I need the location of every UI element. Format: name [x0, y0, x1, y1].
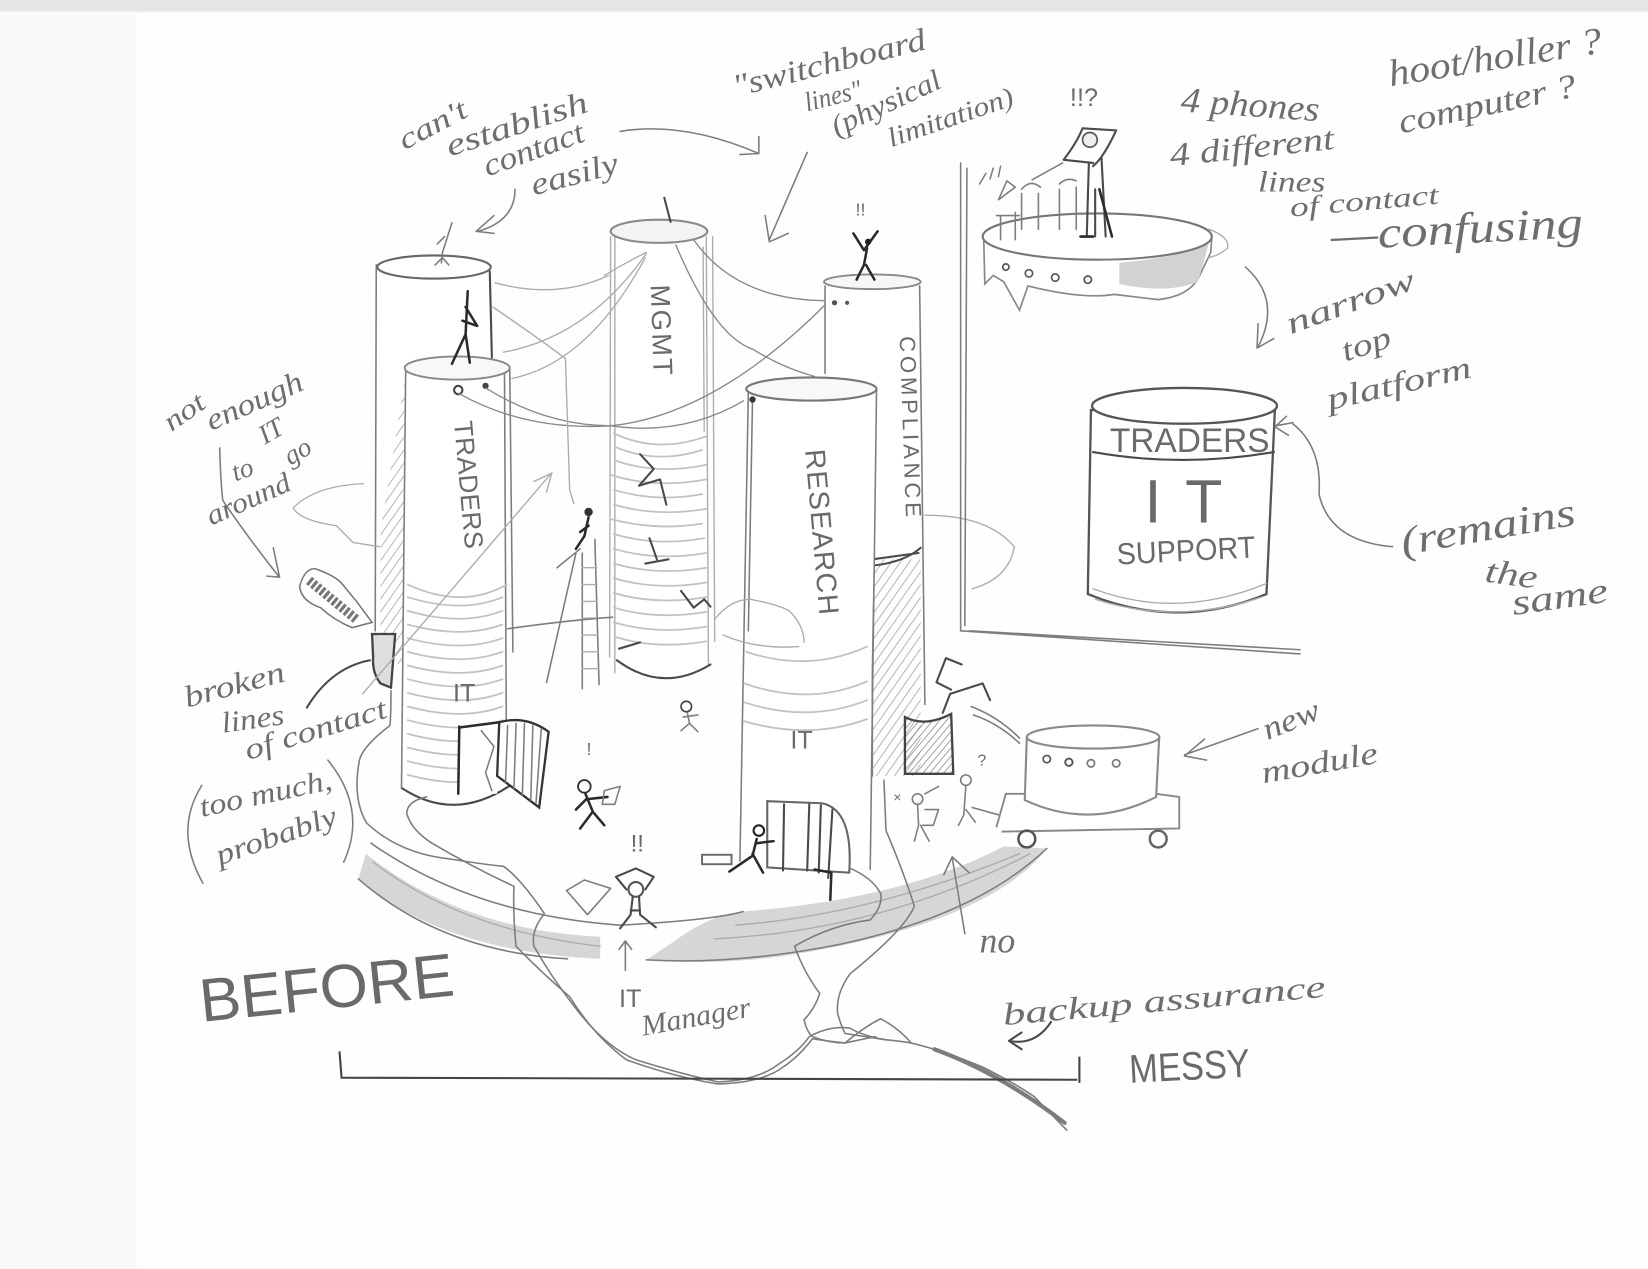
- arrow: bracket to remains the same: [1275, 416, 1393, 547]
- note: hoot/holler computer: computer ?: [1395, 68, 1580, 141]
- note: narrow top platform: [1281, 262, 1474, 417]
- label: IT: IT: [790, 727, 813, 755]
- arrow: long pencil line past traders: [363, 473, 552, 694]
- note: narrow top platform: top: [1337, 319, 1395, 368]
- exclamation: IT manager: !!: [631, 831, 644, 858]
- inset frame: [961, 163, 1300, 654]
- note: new module: new: [1257, 692, 1325, 747]
- note: broken lines of contact: [180, 655, 392, 873]
- stripes: IT section: [408, 585, 507, 782]
- note: switchboard lines: (physical: [826, 64, 946, 143]
- damaged section: [372, 634, 395, 688]
- label: IT Manager: IT: [619, 985, 641, 1013]
- figure: falling person: [681, 701, 698, 732]
- note: not enough IT to go around: not: [158, 386, 213, 438]
- label: TRADERS band: TRADERS: [1110, 422, 1270, 460]
- note: broken lines of contact: of contact: [241, 693, 392, 767]
- note: remains the same: [1397, 489, 1611, 623]
- label: IT: IT: [1145, 468, 1222, 536]
- note: new module: [1257, 692, 1380, 790]
- figure: worker at door: [729, 839, 774, 873]
- figure: person juggling phones: [1064, 128, 1116, 237]
- note: can't establish contact easily: establish: [441, 85, 592, 163]
- tower: Traders: [300, 291, 549, 807]
- label: RESEARCH: RESEARCH: [798, 448, 844, 616]
- small figures on platform: [566, 701, 998, 928]
- figures: group beside compliance: [912, 775, 998, 841]
- note: broken lines of contact: too much,: [197, 764, 335, 824]
- label: IT Manager: [619, 941, 754, 1043]
- question mark: ?: [977, 752, 986, 769]
- tower: back left: [375, 223, 492, 683]
- figure: person on back tower: [435, 223, 452, 265]
- note: hoot/holler computer: [1385, 20, 1605, 141]
- exclamation: compliance: !!: [856, 200, 865, 220]
- note: switchboard lines: "switchboard: [729, 22, 929, 104]
- figure: person on compliance tower: [853, 231, 878, 280]
- figure: person climbing out: [936, 658, 990, 713]
- note: 4 different lines of contact confusing: of contact: [1289, 179, 1442, 223]
- arrow: not enough IT: [220, 448, 280, 577]
- note parentheses: [188, 760, 353, 883]
- note: remains the same: the: [1483, 553, 1540, 597]
- wire: horizontal tower link: [508, 617, 613, 629]
- note: 4 phones: 4 phones: [1180, 80, 1321, 129]
- figure: running person with papers: [576, 780, 620, 828]
- new module on cart: [971, 707, 1179, 847]
- IT section cracks and letters: [619, 454, 710, 649]
- arrow: no: [944, 857, 969, 934]
- note: not enough IT to go around: go: [278, 431, 317, 471]
- IT support bucket: [1088, 388, 1277, 612]
- exclamation: inset: !!?: [1070, 84, 1098, 112]
- note: not enough IT to go around: IT: [252, 411, 290, 450]
- note: hoot/holler computer: hoot/holler ?: [1385, 20, 1605, 95]
- label: IT Manager: Manager: [638, 992, 754, 1043]
- arrow: new module: [1184, 729, 1258, 760]
- note: new module: module: [1258, 735, 1380, 790]
- note: 4 different lines of contact confusing: —confusing: [1328, 198, 1584, 260]
- note: can't establish contact easily: contact: [478, 114, 590, 183]
- note: 4 different lines of contact confusing: [1168, 121, 1584, 260]
- messy cables: [357, 691, 1067, 1130]
- phones on stands: [980, 163, 1076, 240]
- note: broken lines of contact: broken: [180, 655, 288, 714]
- note: narrow top platform: narrow: [1281, 262, 1419, 341]
- label: MGMT: MGMT: [645, 284, 679, 376]
- blob: snapped cable: [300, 569, 372, 628]
- door: research: [767, 801, 850, 900]
- tower: Research: [702, 377, 877, 900]
- ladder with worker: [547, 508, 599, 689]
- compliance door block: [905, 658, 990, 774]
- note: can't establish contact easily: [393, 85, 622, 202]
- arrow: backup: [1009, 1022, 1051, 1049]
- note: can't establish contact easily: can't: [393, 93, 474, 157]
- exclamation: running person: !: [586, 739, 591, 759]
- figure: person on traders tower: [452, 291, 477, 364]
- door: traders: [458, 720, 549, 807]
- arrow: switchboard: [765, 152, 807, 242]
- note: not enough IT to go around: [158, 364, 317, 532]
- note: 4 different lines of contact confusing: lines: [1258, 166, 1325, 198]
- note: not enough IT to go around: enough: [200, 364, 308, 437]
- note: not enough IT to go around: to: [227, 452, 257, 487]
- base platform arc: [358, 843, 1047, 962]
- note: broken lines of contact: lines: [219, 699, 286, 740]
- note: 4 different lines of contact confusing: 4 different: [1168, 121, 1337, 174]
- floating narrow top platform: [980, 128, 1228, 310]
- arrow: narrow top platform: [1245, 267, 1274, 348]
- label: backup assurance: backup assurance: [1001, 969, 1327, 1032]
- note: remains the same: same: [1509, 570, 1611, 623]
- switchboard lines between towers: [458, 240, 825, 504]
- cross mark: ×: [893, 790, 901, 805]
- arrows: contact note: [476, 129, 759, 233]
- timeline baseline: [339, 1051, 1079, 1083]
- note: can't establish contact easily: easily: [527, 145, 622, 202]
- cloud scribbles: [293, 484, 1014, 647]
- note: switchboard lines: limitation): [883, 82, 1017, 153]
- figure: IT manager: [566, 868, 656, 928]
- label: IT: IT: [453, 679, 475, 707]
- note: narrow top platform: platform: [1321, 350, 1474, 417]
- heading: BEFORE: BEFORE: [196, 941, 457, 1035]
- tower: Compliance: [824, 200, 926, 776]
- label: MESSY: MESSY: [1128, 1042, 1251, 1092]
- note: broken lines of contact: probably: [209, 800, 342, 873]
- note: switchboard lines: lines": [801, 74, 865, 117]
- label: SUPPORT: SUPPORT: [1116, 530, 1256, 572]
- label: TRADERS: TRADERS: [448, 420, 489, 550]
- label: no: no: [980, 921, 1015, 961]
- dropped box: [702, 855, 732, 864]
- note: not enough IT to go around: around: [201, 467, 297, 532]
- note: switchboard lines: [729, 22, 1017, 153]
- tower: MGMT: [610, 198, 715, 679]
- note: remains the same: (remains: [1397, 489, 1579, 564]
- label: COMPLIANCE: COMPLIANCE: [895, 336, 926, 517]
